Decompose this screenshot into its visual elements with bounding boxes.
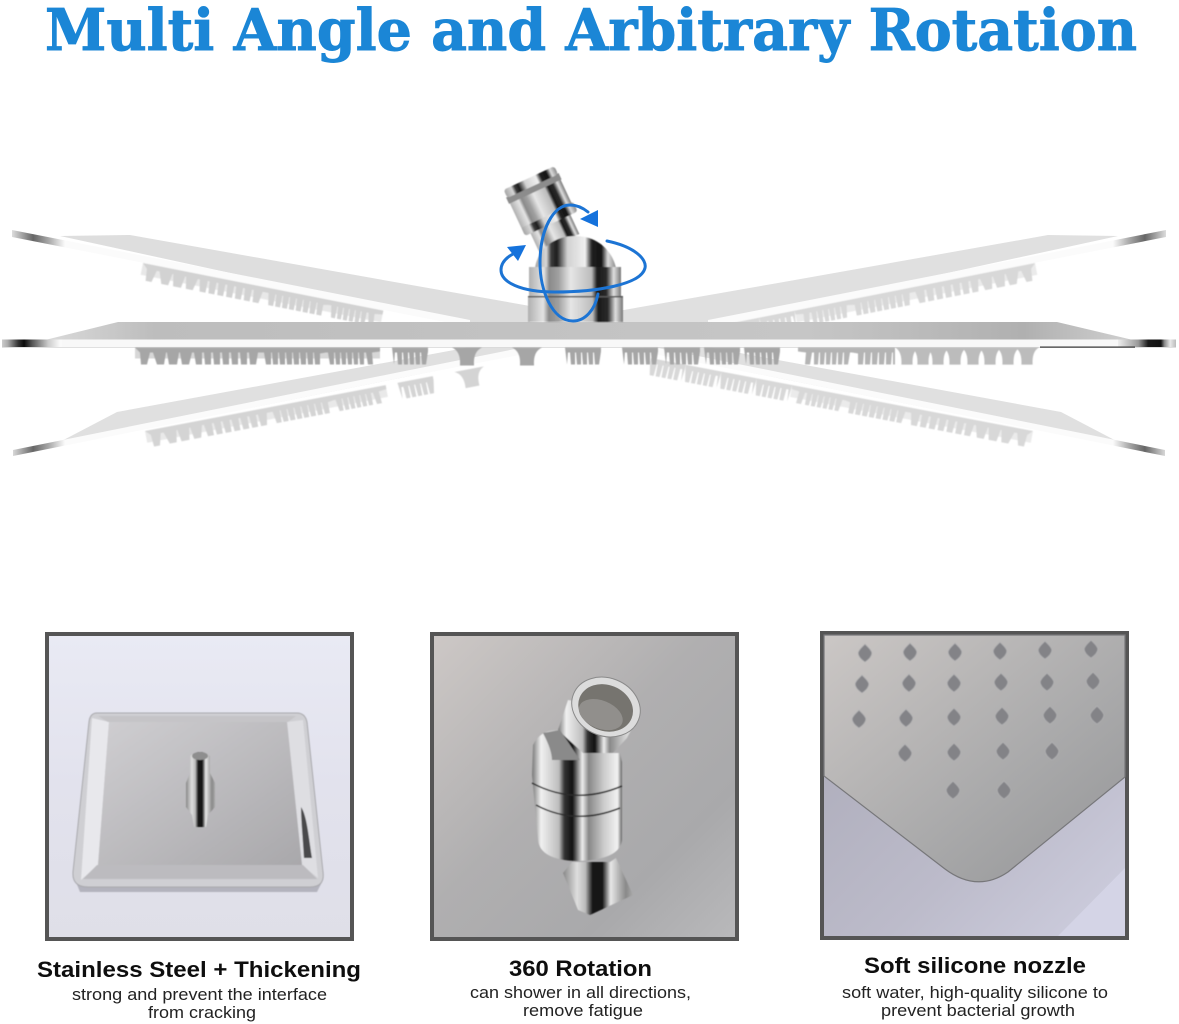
- label: Soft silicone nozzle: Soft silicone nozzle: [864, 953, 1086, 978]
- plate corner: [824, 635, 1125, 882]
- panel: swivel connector photo: [432, 634, 737, 939]
- caption line 2: from cracking: [148, 1004, 256, 1022]
- caption line 2: remove fatigue: [523, 1002, 643, 1020]
- shower plate level: centre: [2, 322, 1176, 366]
- light patch: [1058, 868, 1125, 936]
- threaded stem: [186, 752, 215, 827]
- shower plate tilted: lower right: [643, 336, 1165, 456]
- swivel ball joint arm: [503, 165, 623, 322]
- nozzle grid: [852, 640, 1104, 799]
- caption line 2: prevent bacterial growth: [881, 1002, 1075, 1020]
- base: [528, 297, 623, 322]
- product illustration: shower head at multiple angles: [2, 165, 1176, 456]
- shower plate: [73, 713, 323, 892]
- shower plate tilted: upper right: [618, 230, 1166, 341]
- panel: silicone nozzles photo: [822, 633, 1127, 938]
- lower nozzle: [563, 858, 633, 915]
- caption line 1: can shower in all directions,: [470, 984, 691, 1002]
- panel: stainless steel plate photo: [47, 634, 352, 939]
- threaded mouth with mesh: [563, 667, 649, 747]
- connector body: [532, 700, 640, 861]
- dome: [535, 236, 616, 268]
- caption line 1: strong and prevent the interface: [72, 986, 327, 1004]
- label: Stainless Steel + Thickening: Stainless Steel + Thickening: [37, 957, 361, 982]
- caption line 1: soft water, high-quality silicone to: [842, 984, 1108, 1002]
- label: 360 Rotation: 360 Rotation: [509, 956, 652, 981]
- shower plate tilted: lower left: [13, 336, 535, 456]
- collar: [529, 267, 621, 297]
- shower plate tilted: upper left: [12, 230, 530, 327]
- rotation arrows: [501, 205, 645, 321]
